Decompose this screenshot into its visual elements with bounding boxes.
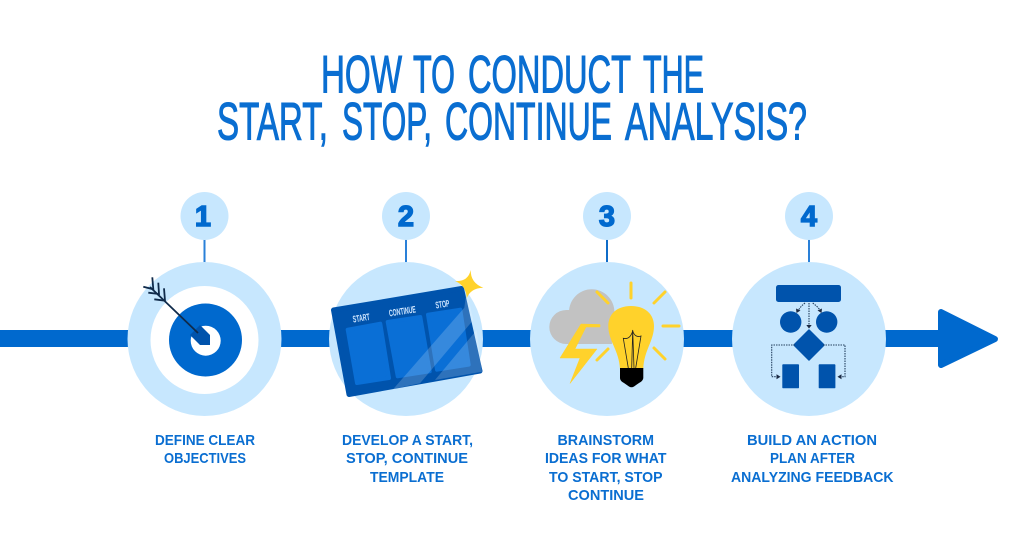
caption 4: BUILD AN ACTION bbox=[747, 432, 877, 449]
caption 2 bbox=[342, 432, 473, 486]
step 3 bbox=[530, 192, 684, 504]
caption 4 bbox=[731, 432, 894, 486]
step 4 bbox=[731, 192, 894, 486]
number badge 2 bbox=[382, 192, 430, 264]
icon: target with arrow bbox=[128, 262, 282, 416]
caption 1 bbox=[155, 432, 255, 467]
caption 4: PLAN AFTER bbox=[770, 450, 855, 467]
icon: storm cloud and light bulb bbox=[530, 262, 684, 416]
caption 3: CONTINUE bbox=[568, 487, 644, 504]
caption 1: OBJECTIVES bbox=[164, 450, 246, 467]
title: TO bbox=[413, 46, 455, 105]
icon: start stop continue template card: STOP bbox=[435, 298, 451, 311]
icon: start stop continue template card: START bbox=[352, 312, 371, 325]
number badge 3 bbox=[583, 192, 631, 264]
number badge 3: 3 bbox=[599, 201, 615, 233]
step 2 bbox=[329, 192, 483, 486]
title: HOW bbox=[321, 46, 402, 105]
caption 2: TEMPLATE bbox=[370, 469, 444, 486]
step 1 bbox=[128, 192, 282, 467]
caption 2: DEVELOP A START, bbox=[342, 432, 473, 449]
caption 4: ANALYZING FEEDBACK bbox=[731, 469, 894, 486]
icon: flowchart bbox=[732, 262, 886, 416]
caption 3 bbox=[545, 432, 666, 504]
number badge 1 bbox=[180, 192, 228, 264]
title: STOP, bbox=[342, 92, 432, 151]
title bbox=[217, 46, 807, 151]
title: ANALYSIS? bbox=[625, 92, 807, 151]
number badge 4 bbox=[785, 192, 833, 264]
number badge 4: 4 bbox=[801, 201, 817, 233]
title: CONDUCT bbox=[468, 46, 631, 105]
title: THE bbox=[643, 46, 704, 105]
title: START, bbox=[217, 92, 328, 151]
timeline arrow bbox=[0, 312, 995, 365]
icon: sparkle bbox=[455, 270, 483, 298]
caption 1: DEFINE CLEAR bbox=[155, 432, 255, 449]
caption 3: BRAINSTORM bbox=[558, 432, 654, 449]
icon: start stop continue template card bbox=[329, 262, 483, 416]
caption 3: TO START, STOP bbox=[549, 469, 662, 486]
title: CONTINUE bbox=[445, 92, 612, 151]
caption 3: IDEAS FOR WHAT bbox=[545, 450, 666, 467]
number badge 1: 1 bbox=[195, 201, 211, 233]
number badge 2: 2 bbox=[398, 201, 414, 233]
caption 2: STOP, CONTINUE bbox=[346, 450, 468, 467]
icon: start stop continue template card: CONTINUE bbox=[388, 304, 417, 319]
